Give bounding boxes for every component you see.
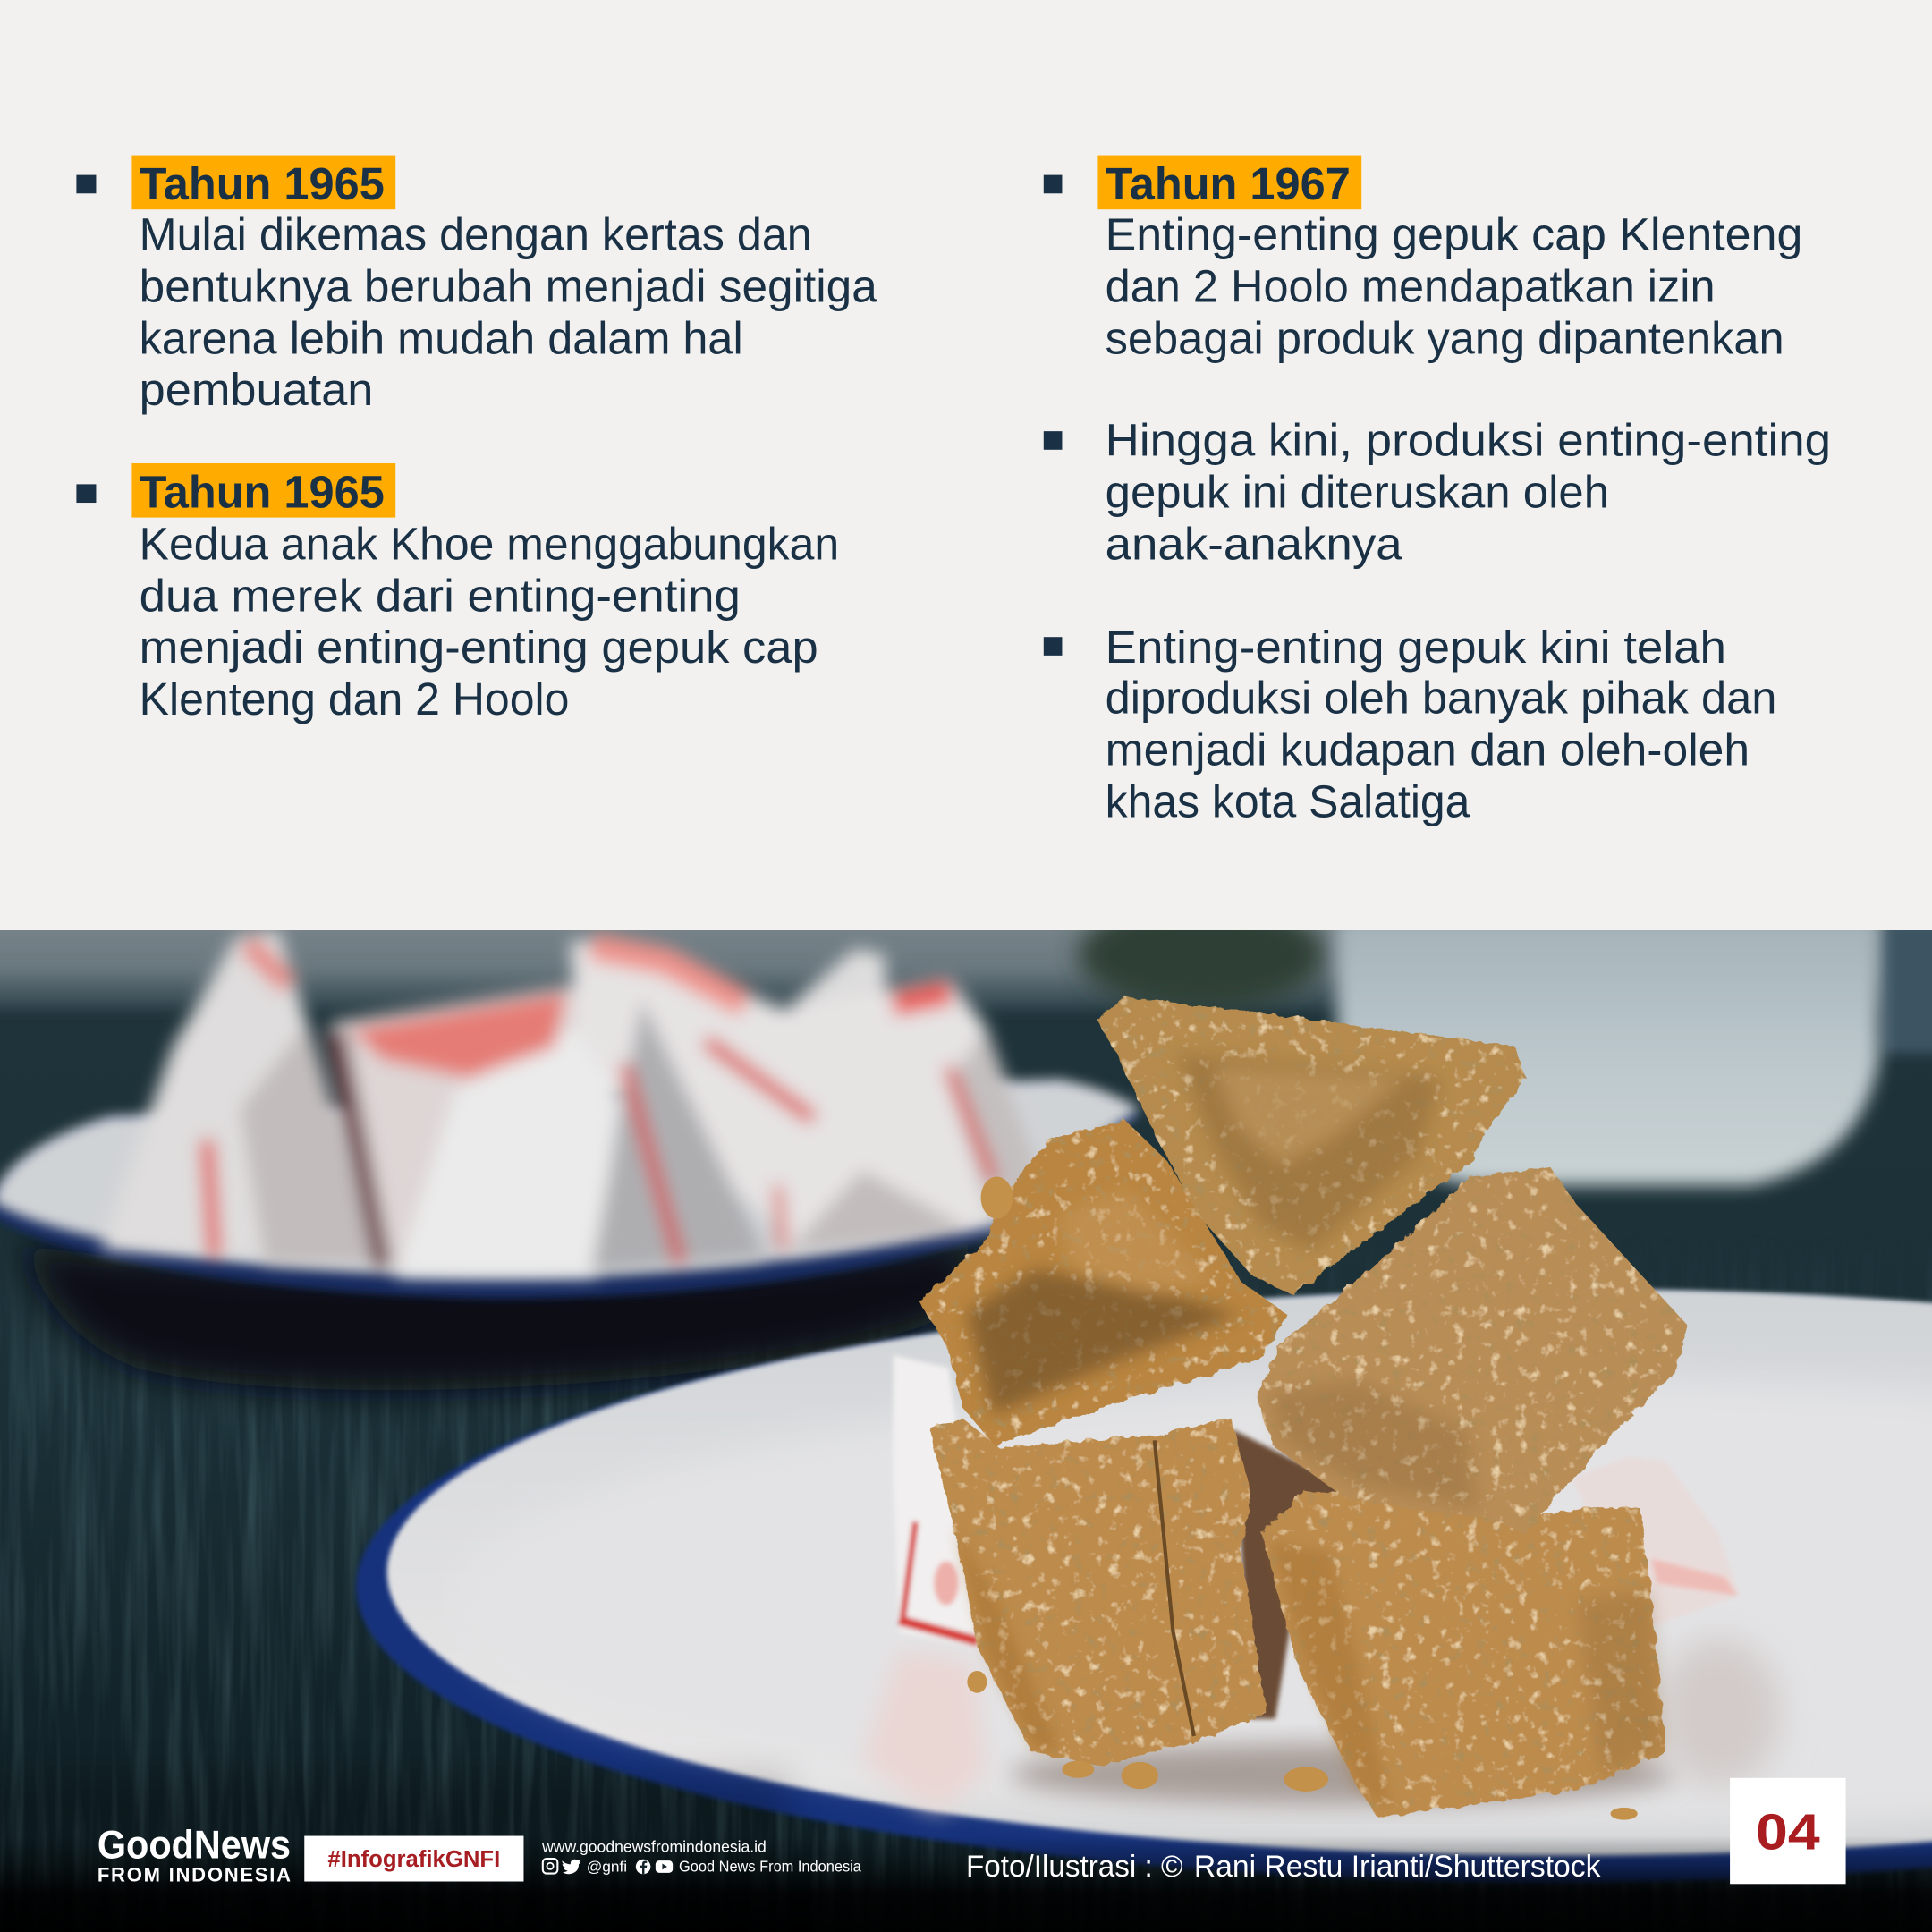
- bullet: production today: [1044, 415, 1831, 569]
- bullet: Tahun 1965 packaging: Tahun 1965: [140, 158, 385, 209]
- bullet: souvenir of Salatiga: diproduksi oleh banyak pihak dan: [1106, 673, 1776, 724]
- bullet: souvenir of Salatiga: menjadi kudapan dan oleh-oleh: [1106, 724, 1750, 775]
- hashtag box: [304, 1836, 523, 1882]
- wrapper packets under the food: [894, 1355, 1740, 1648]
- page number: [1730, 1778, 1846, 1884]
- bullet: Tahun 1965 merger: [76, 463, 839, 724]
- right text column: [1044, 156, 1831, 826]
- plant and cup: [1078, 900, 1325, 1011]
- website and social handles: Good News From Indonesia: [679, 1857, 861, 1875]
- bullet: production today: Hingga kini, produksi enting-enting: [1106, 415, 1831, 466]
- website and social handles: @gnfi: [587, 1858, 627, 1875]
- rear plate underside: [25, 1238, 973, 1390]
- icon: instagram: [543, 1859, 557, 1874]
- bullet: Tahun 1965 packaging: bentuknya berubah menjadi segitiga: [140, 260, 877, 311]
- piece: right: [1257, 1167, 1687, 1533]
- front plate: [387, 1289, 1932, 1856]
- bullet: Tahun 1967 patent: dan 2 Hoolo mendapatkan izin: [1106, 260, 1716, 311]
- icon: youtube: [656, 1860, 673, 1873]
- bullet: Tahun 1965 packaging: Mulai dikemas dengan kertas dan: [140, 209, 812, 260]
- bullet: production today: anak-anaknya: [1106, 518, 1402, 569]
- logo: GoodNews from Indonesia: FROM INDONESIA: [97, 1864, 291, 1886]
- bullet: Tahun 1967 patent: Tahun 1967: [1106, 158, 1351, 209]
- website and social handles: [541, 1837, 861, 1875]
- bullet: Tahun 1967 patent: Enting-enting gepuk cap Klenteng: [1106, 209, 1802, 260]
- piece: top: [1097, 996, 1527, 1295]
- bullet: souvenir of Salatiga: Enting-enting gepuk kini telah: [1106, 622, 1726, 673]
- bullet: souvenir of Salatiga: [1044, 622, 1776, 826]
- website and social handles: www.goodnewsfromindonesia.id: [541, 1837, 767, 1855]
- bullet: production today: gepuk ini diteruskan oleh: [1106, 467, 1609, 518]
- dark gaps between pieces: [1233, 1429, 1429, 1719]
- bullet: Tahun 1965 packaging: pembuatan: [140, 364, 373, 415]
- bullet: Tahun 1967 patent: sebagai produk yang dipantenkan: [1106, 312, 1784, 363]
- bullet: Tahun 1965 merger: Kedua anak Khoe menggabungkan: [140, 518, 839, 569]
- logo: GoodNews from Indonesia: [97, 1823, 291, 1886]
- bullet: Tahun 1965 merger: Tahun 1965: [140, 467, 385, 518]
- piece: left: [918, 1120, 1288, 1445]
- bottom darkening: [0, 1836, 1932, 1932]
- bullet: Tahun 1965 merger: Klenteng dan 2 Hoolo: [140, 674, 569, 724]
- hashtag box: #InfografikGNFI: [327, 1845, 500, 1872]
- bullet: Tahun 1965 packaging: karena lebih mudah dalam hal: [140, 312, 743, 363]
- bullet: Tahun 1967 patent: [1044, 156, 1802, 363]
- logo: GoodNews from Indonesia: GoodNews: [97, 1823, 291, 1867]
- left text column: [76, 156, 877, 724]
- bullet: Tahun 1965 merger: dua merek dari enting-enting: [140, 570, 741, 621]
- stray crumbs: [967, 1177, 1843, 1820]
- photo credit: Foto/Ilustrasi : ©: [966, 1850, 1182, 1884]
- front plate rim: [356, 1292, 1932, 1883]
- rear plate rim: [0, 1084, 1140, 1299]
- piece: lower right: [1262, 1491, 1665, 1818]
- rear packets: [101, 930, 1057, 1276]
- bullet: Tahun 1965 merger: menjadi enting-enting gepuk cap: [140, 622, 818, 673]
- photo credit: [966, 1850, 1601, 1884]
- rear plate: [0, 1080, 1140, 1276]
- bullet: Tahun 1965 packaging: [76, 156, 877, 415]
- icon: facebook: [636, 1860, 650, 1874]
- photo: enting-enting gepuk on plates: [0, 900, 1932, 1932]
- piece: lower left: [929, 1419, 1267, 1766]
- page number: 04: [1756, 1804, 1820, 1860]
- page background: [0, 0, 1932, 930]
- photo credit: Rani Restu Irianti/Shutterstock: [1194, 1850, 1601, 1884]
- icon: twitter: [562, 1860, 581, 1874]
- plate shadow and reflection: [862, 1651, 986, 1811]
- bullet: souvenir of Salatiga: khas kota Salatiga: [1106, 775, 1470, 826]
